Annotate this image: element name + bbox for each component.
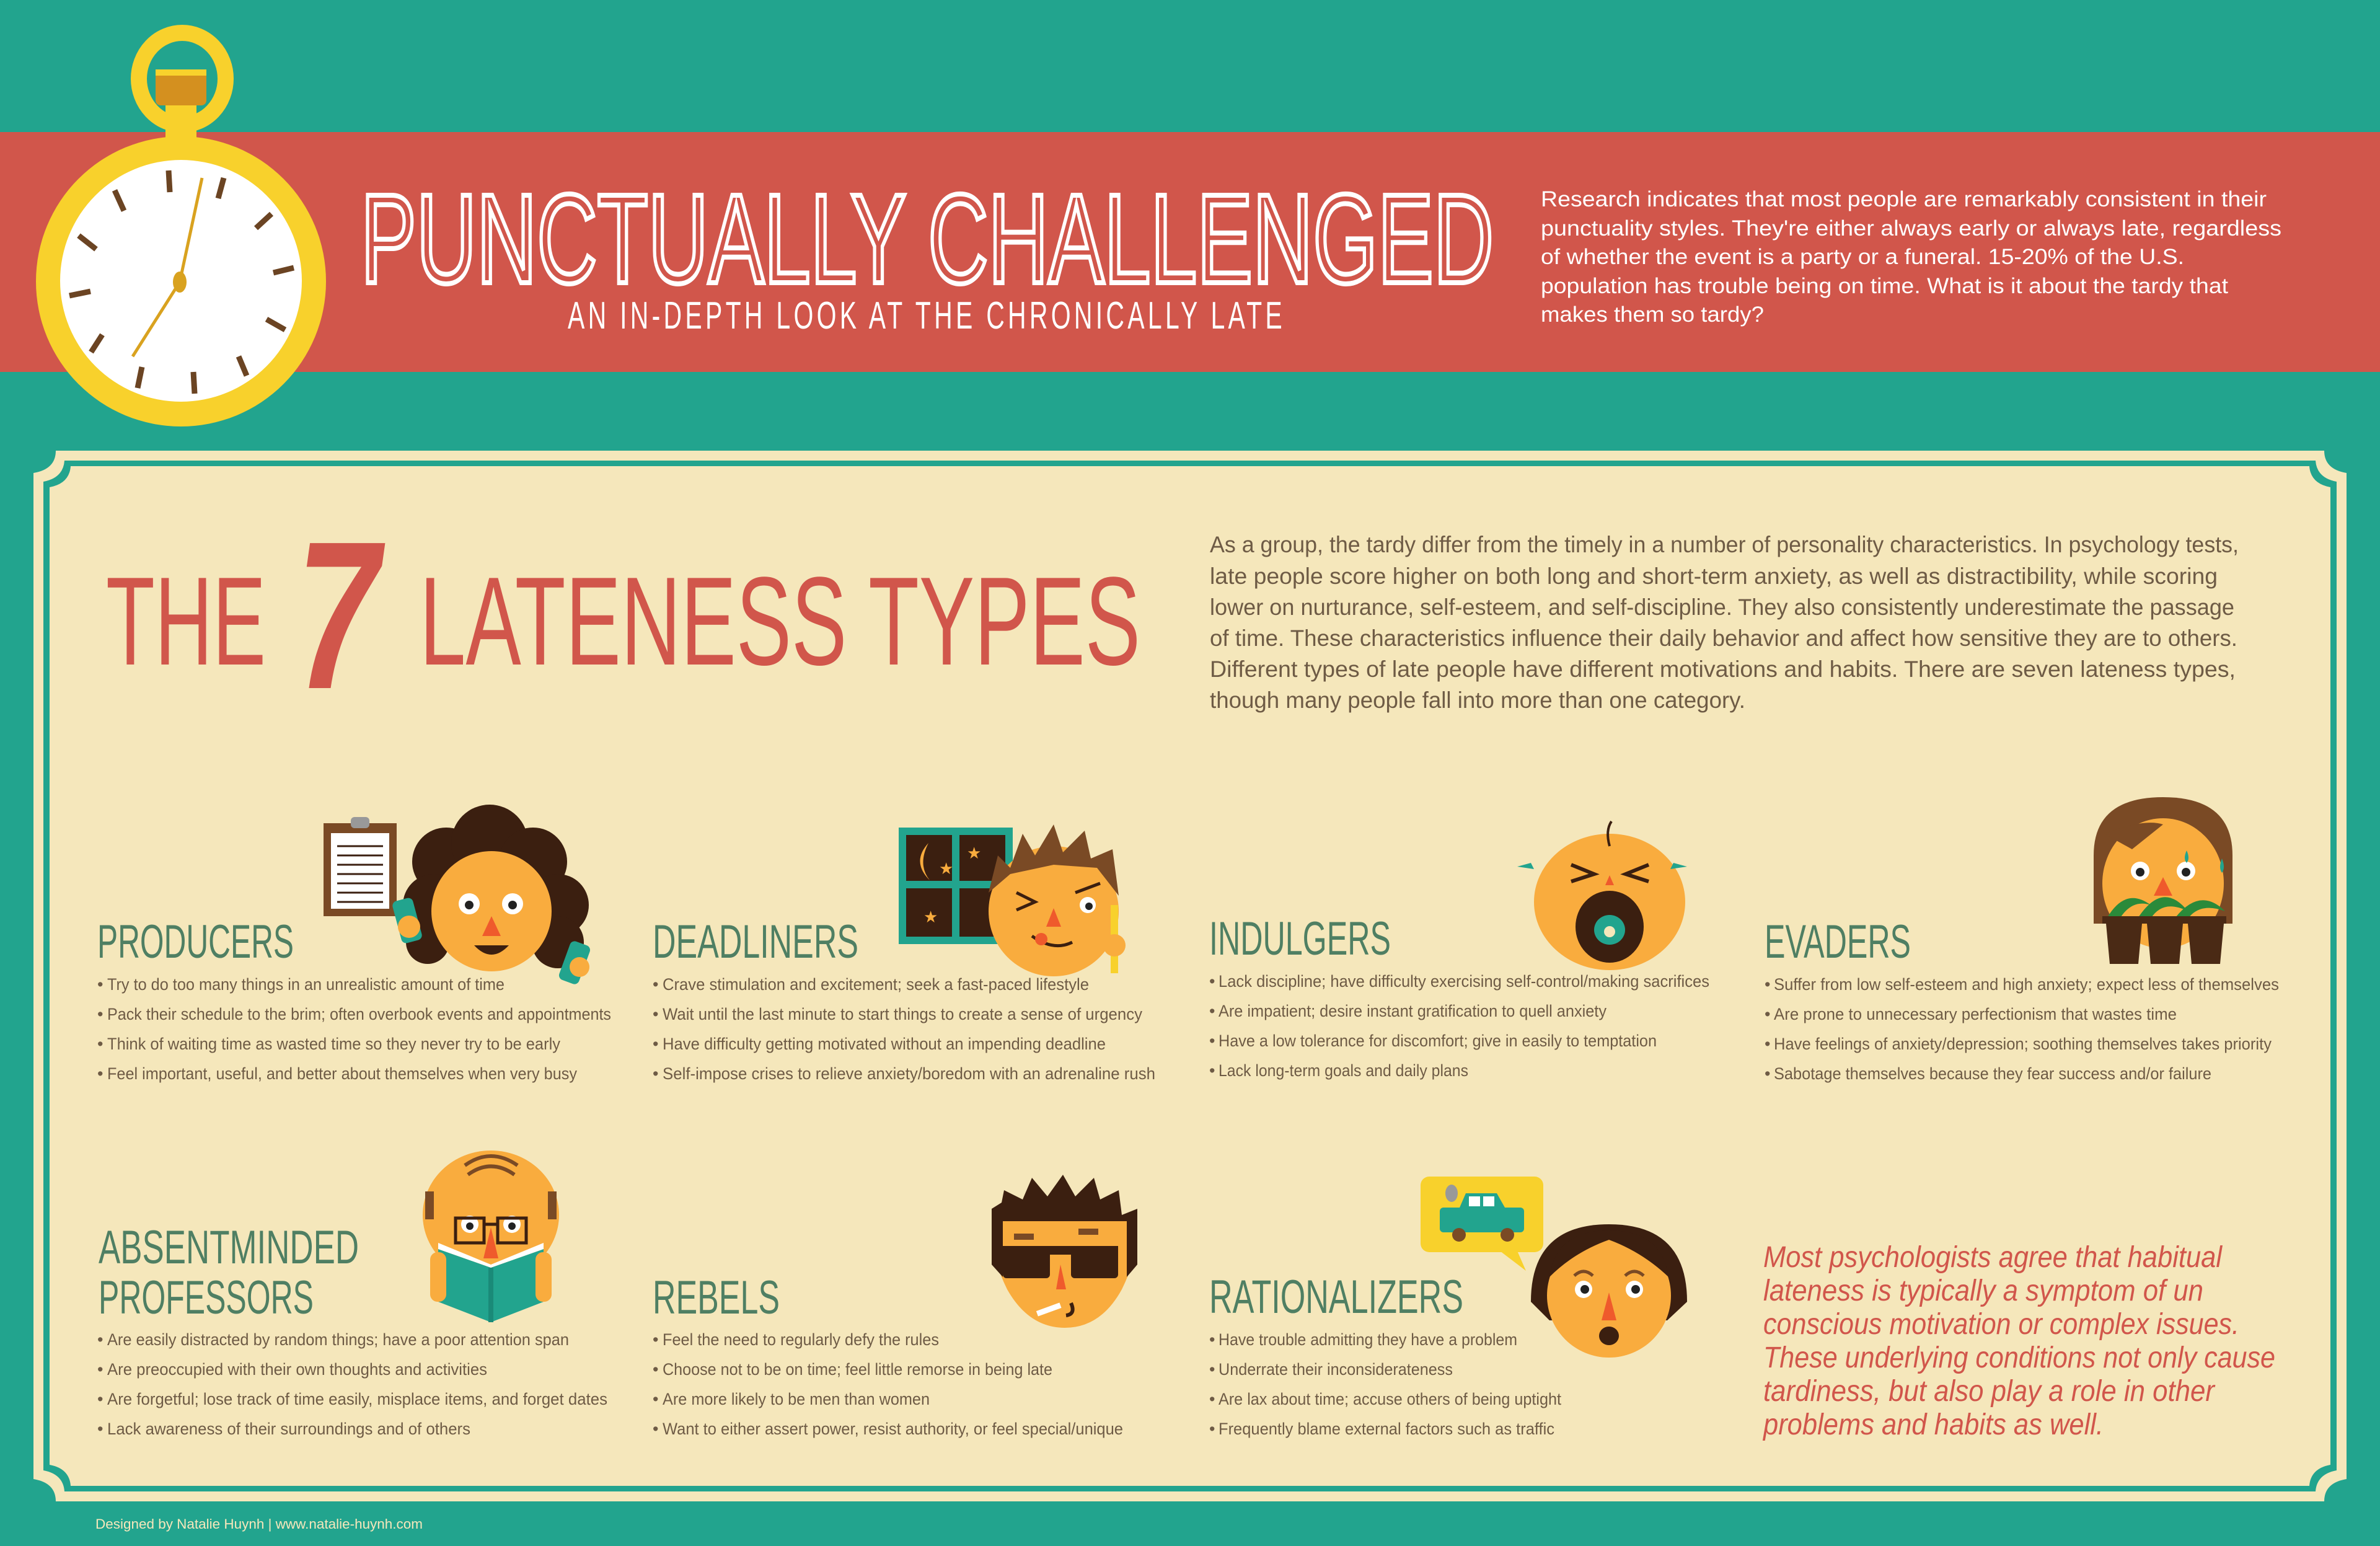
panel: deadliners <box>653 824 1155 1083</box>
bullets: deadliners: Wait until the last minute to start things to create a sense of urgency <box>663 1005 1142 1023</box>
bullets: indulgers: • <box>1209 1061 1215 1080</box>
bullets: rebels: • <box>653 1390 658 1408</box>
header red band <box>0 132 2380 372</box>
panel: evaders <box>1765 797 2279 1083</box>
intro paragraph: though many people fall into more than one category. <box>1210 687 1745 713</box>
bullets: evaders <box>1765 975 2279 1083</box>
callout: conclusion italic text: These underlying conditions not only cause <box>1763 1341 2275 1374</box>
intro paragraph: As a group, the tardy differ from the timely in a number of personality characteristics. In psychology tests, <box>1210 532 2239 557</box>
callout: conclusion italic text: tardiness, but also play a role in other <box>1763 1375 2216 1408</box>
bullets: rebels: Feel the need to regularly defy the rules <box>663 1330 939 1349</box>
heading: deadliners: DEADLINERS <box>653 916 858 968</box>
bullets: indulgers: Lack discipline; have difficulty exercising self-control/making sacrifices <box>1219 972 1709 991</box>
section heading: the 7 lateness types: 7 <box>296 498 387 733</box>
bullets: rebels: Are more likely to be men than women <box>663 1390 930 1408</box>
bullets: producers: Think of waiting time as wasted time so they never try to be early <box>107 1035 560 1053</box>
header intro text: population has trouble being on time. What is it about the tardy that <box>1541 274 2228 298</box>
bullets: deadliners: • <box>653 1035 658 1053</box>
bullets: deadliners <box>653 975 1155 1083</box>
bullets: rationalizers: Underrate their inconsiderateness <box>1219 1360 1453 1379</box>
bullets: producers: • <box>97 975 103 994</box>
bullets: professors: • <box>97 1330 103 1349</box>
bullets: producers: • <box>97 1064 103 1083</box>
bullets: indulgers: Have a low tolerance for discomfort; give in easily to temptation <box>1219 1031 1657 1050</box>
heading: producers: PRODUCERS <box>97 916 294 968</box>
bullets: professors: Are forgetful; lose track of time easily, misplace items, and forget dates <box>107 1390 607 1408</box>
heading: indulgers: INDULGERS <box>1209 912 1391 965</box>
bullets: rationalizers: Are lax about time; accuse others of being uptight <box>1219 1390 1561 1408</box>
bullets: deadliners: Have difficulty getting motivated without an impending deadline <box>663 1035 1106 1053</box>
bullets: evaders: • <box>1765 1005 1770 1023</box>
bullets: indulgers: Are impatient; desire instant gratification to quell anxiety <box>1219 1002 1606 1020</box>
icon: pocket watch <box>36 33 326 426</box>
bullets: evaders: • <box>1765 1035 1770 1053</box>
bullets: indulgers: • <box>1209 1031 1215 1050</box>
heading: evaders: EVADERS <box>1765 916 1911 968</box>
heading: rationalizers: RATIONALIZERS <box>1209 1271 1463 1323</box>
icon: professor reading book <box>423 1151 559 1322</box>
bullets: indulgers: • <box>1209 1002 1215 1020</box>
bullets: indulgers: • <box>1209 972 1215 991</box>
bullets: rebels: • <box>653 1420 658 1438</box>
section heading: the 7 lateness types: LATENESS TYPES <box>420 551 1140 692</box>
intro paragraph: late people score higher on both long and short-term anxiety, as well as distractibility, while scoring <box>1210 563 2218 589</box>
bullets: professors: • <box>97 1390 103 1408</box>
bullets: producers: Feel important, useful, and better about themselves when very busy <box>107 1064 577 1083</box>
icon: deadliner with night window: ★ <box>967 844 981 862</box>
panel: rebels <box>653 1175 1137 1438</box>
bullets: rebels: • <box>653 1360 658 1379</box>
bullets: deadliners: • <box>653 1064 658 1083</box>
bullets: indulgers <box>1209 972 1709 1080</box>
bullets: rebels <box>653 1330 1123 1438</box>
bullets: producers: Try to do too many things in an unrealistic amount of time <box>107 975 505 994</box>
bullets: professors: • <box>97 1360 103 1379</box>
intro paragraph: lower on nurturance, self-esteem, and self-discipline. They also consistently underestimate the passage <box>1210 594 2234 620</box>
bullets: professors: • <box>97 1420 103 1438</box>
bullets: rebels: Want to either assert power, resist authority, or feel special/unique <box>663 1420 1123 1438</box>
header intro text <box>1541 187 2281 327</box>
title: PUNCTUALLY CHALLENGED <box>361 168 1494 310</box>
panel: indulgers <box>1209 821 1709 1080</box>
bullets: professors: Are easily distracted by random things; have a poor attention span <box>107 1330 569 1349</box>
bullets: rationalizers: • <box>1209 1360 1215 1379</box>
icon: deadliner with night window: ★ <box>939 860 953 878</box>
intro paragraph: of time. These characteristics influence their daily behavior and affect how sensitive they are to others. <box>1210 625 2237 651</box>
bullets: producers <box>97 975 611 1083</box>
main panel <box>33 451 2347 1501</box>
bullets: professors: Lack awareness of their surroundings and of others <box>107 1420 470 1438</box>
bullets: evaders: • <box>1765 1064 1770 1083</box>
bullets: rebels: Choose not to be on time; feel little remorse in being late <box>663 1360 1052 1379</box>
bullets: producers: • <box>97 1035 103 1053</box>
callout: conclusion italic text: problems and habits as well. <box>1762 1408 2104 1441</box>
panel: producers <box>97 805 611 1083</box>
icon: deadliner with night window <box>899 824 1126 976</box>
bullets: indulgers: Lack long-term goals and daily plans <box>1219 1061 1468 1080</box>
bullets: evaders: Are prone to unnecessary perfectionism that wastes time <box>1774 1005 2177 1023</box>
callout: conclusion italic text: lateness is typically a symptom of un <box>1763 1274 2203 1307</box>
heading: absentminded professors: PROFESSORS <box>99 1271 314 1324</box>
bullets: producers: Pack their schedule to the brim; often overbook events and appointments <box>107 1005 611 1023</box>
callout: conclusion italic text <box>1762 1241 2275 1441</box>
bullets: rebels: • <box>653 1330 658 1349</box>
section heading: the 7 lateness types <box>106 498 1140 733</box>
header intro text: makes them so tardy? <box>1541 303 1764 327</box>
bullets: deadliners: Self-impose crises to relieve anxiety/boredom with an adrenaline rush <box>663 1064 1155 1083</box>
icon: producer with clipboard <box>324 805 591 986</box>
heading: rebels: REBELS <box>653 1271 780 1324</box>
callout: conclusion italic text: conscious motivation or complex issues. <box>1763 1308 2239 1341</box>
bullets: evaders: • <box>1765 975 1770 994</box>
bullets: evaders: Sabotage themselves because they fear success and/or failure <box>1774 1064 2211 1083</box>
bullets: evaders: Have feelings of anxiety/depression; soothing themselves takes priority <box>1774 1035 2272 1053</box>
heading: absentminded professors <box>99 1221 359 1324</box>
panel: rationalizers <box>1209 1177 1687 1438</box>
heading: absentminded professors: ABSENTMINDED <box>99 1221 359 1274</box>
header intro text: Research indicates that most people are remarkably consistent in their <box>1541 187 2267 211</box>
intro paragraph <box>1210 532 2239 713</box>
bullets: deadliners: Crave stimulation and excitement; seek a fast-paced lifestyle <box>663 975 1089 994</box>
bullets: producers: • <box>97 1005 103 1023</box>
callout: conclusion italic text: Most psychologists agree that habitual <box>1763 1241 2223 1274</box>
bullets: professors <box>97 1330 607 1438</box>
bullets: deadliners: • <box>653 975 658 994</box>
bullets: rationalizers: • <box>1209 1390 1215 1408</box>
section heading: the 7 lateness types: THE <box>106 551 266 692</box>
bullets: rationalizers: • <box>1209 1330 1215 1349</box>
bullets: professors: Are preoccupied with their own thoughts and activities <box>107 1360 487 1379</box>
icon: deadliner with night window: ★ <box>923 908 938 926</box>
bullets: rationalizers <box>1209 1330 1561 1438</box>
icon: evader behind plants <box>2094 797 2232 964</box>
bullets: evaders: Suffer from low self-esteem and high anxiety; expect less of themselves <box>1774 975 2279 994</box>
bullets: rationalizers: Frequently blame external factors such as traffic <box>1219 1420 1554 1438</box>
icon: rationalizer with car speech bubble <box>1421 1177 1687 1358</box>
footer credit: Designed by Natalie Huynh | www.natalie-huynh.com <box>95 1516 423 1532</box>
header intro text: of whether the event is a party or a funeral. 15-20% of the U.S. <box>1541 245 2184 269</box>
header intro text: punctuality styles. They're either always early or always late, regardless <box>1541 216 2281 241</box>
bullets: rationalizers: Have trouble admitting they have a problem <box>1219 1330 1517 1349</box>
icon: rebel with sunglasses <box>992 1175 1137 1328</box>
panel: absentminded professors <box>97 1151 607 1438</box>
subtitle: AN IN-DEPTH LOOK AT THE CHRONICALLY LATE <box>568 294 1285 337</box>
bullets: deadliners: • <box>653 1005 658 1023</box>
intro paragraph: Different types of late people have different motivations and habits. There are seven lateness types, <box>1210 656 2236 682</box>
bullets: rationalizers: • <box>1209 1420 1215 1438</box>
icon: crying baby <box>1517 821 1687 970</box>
